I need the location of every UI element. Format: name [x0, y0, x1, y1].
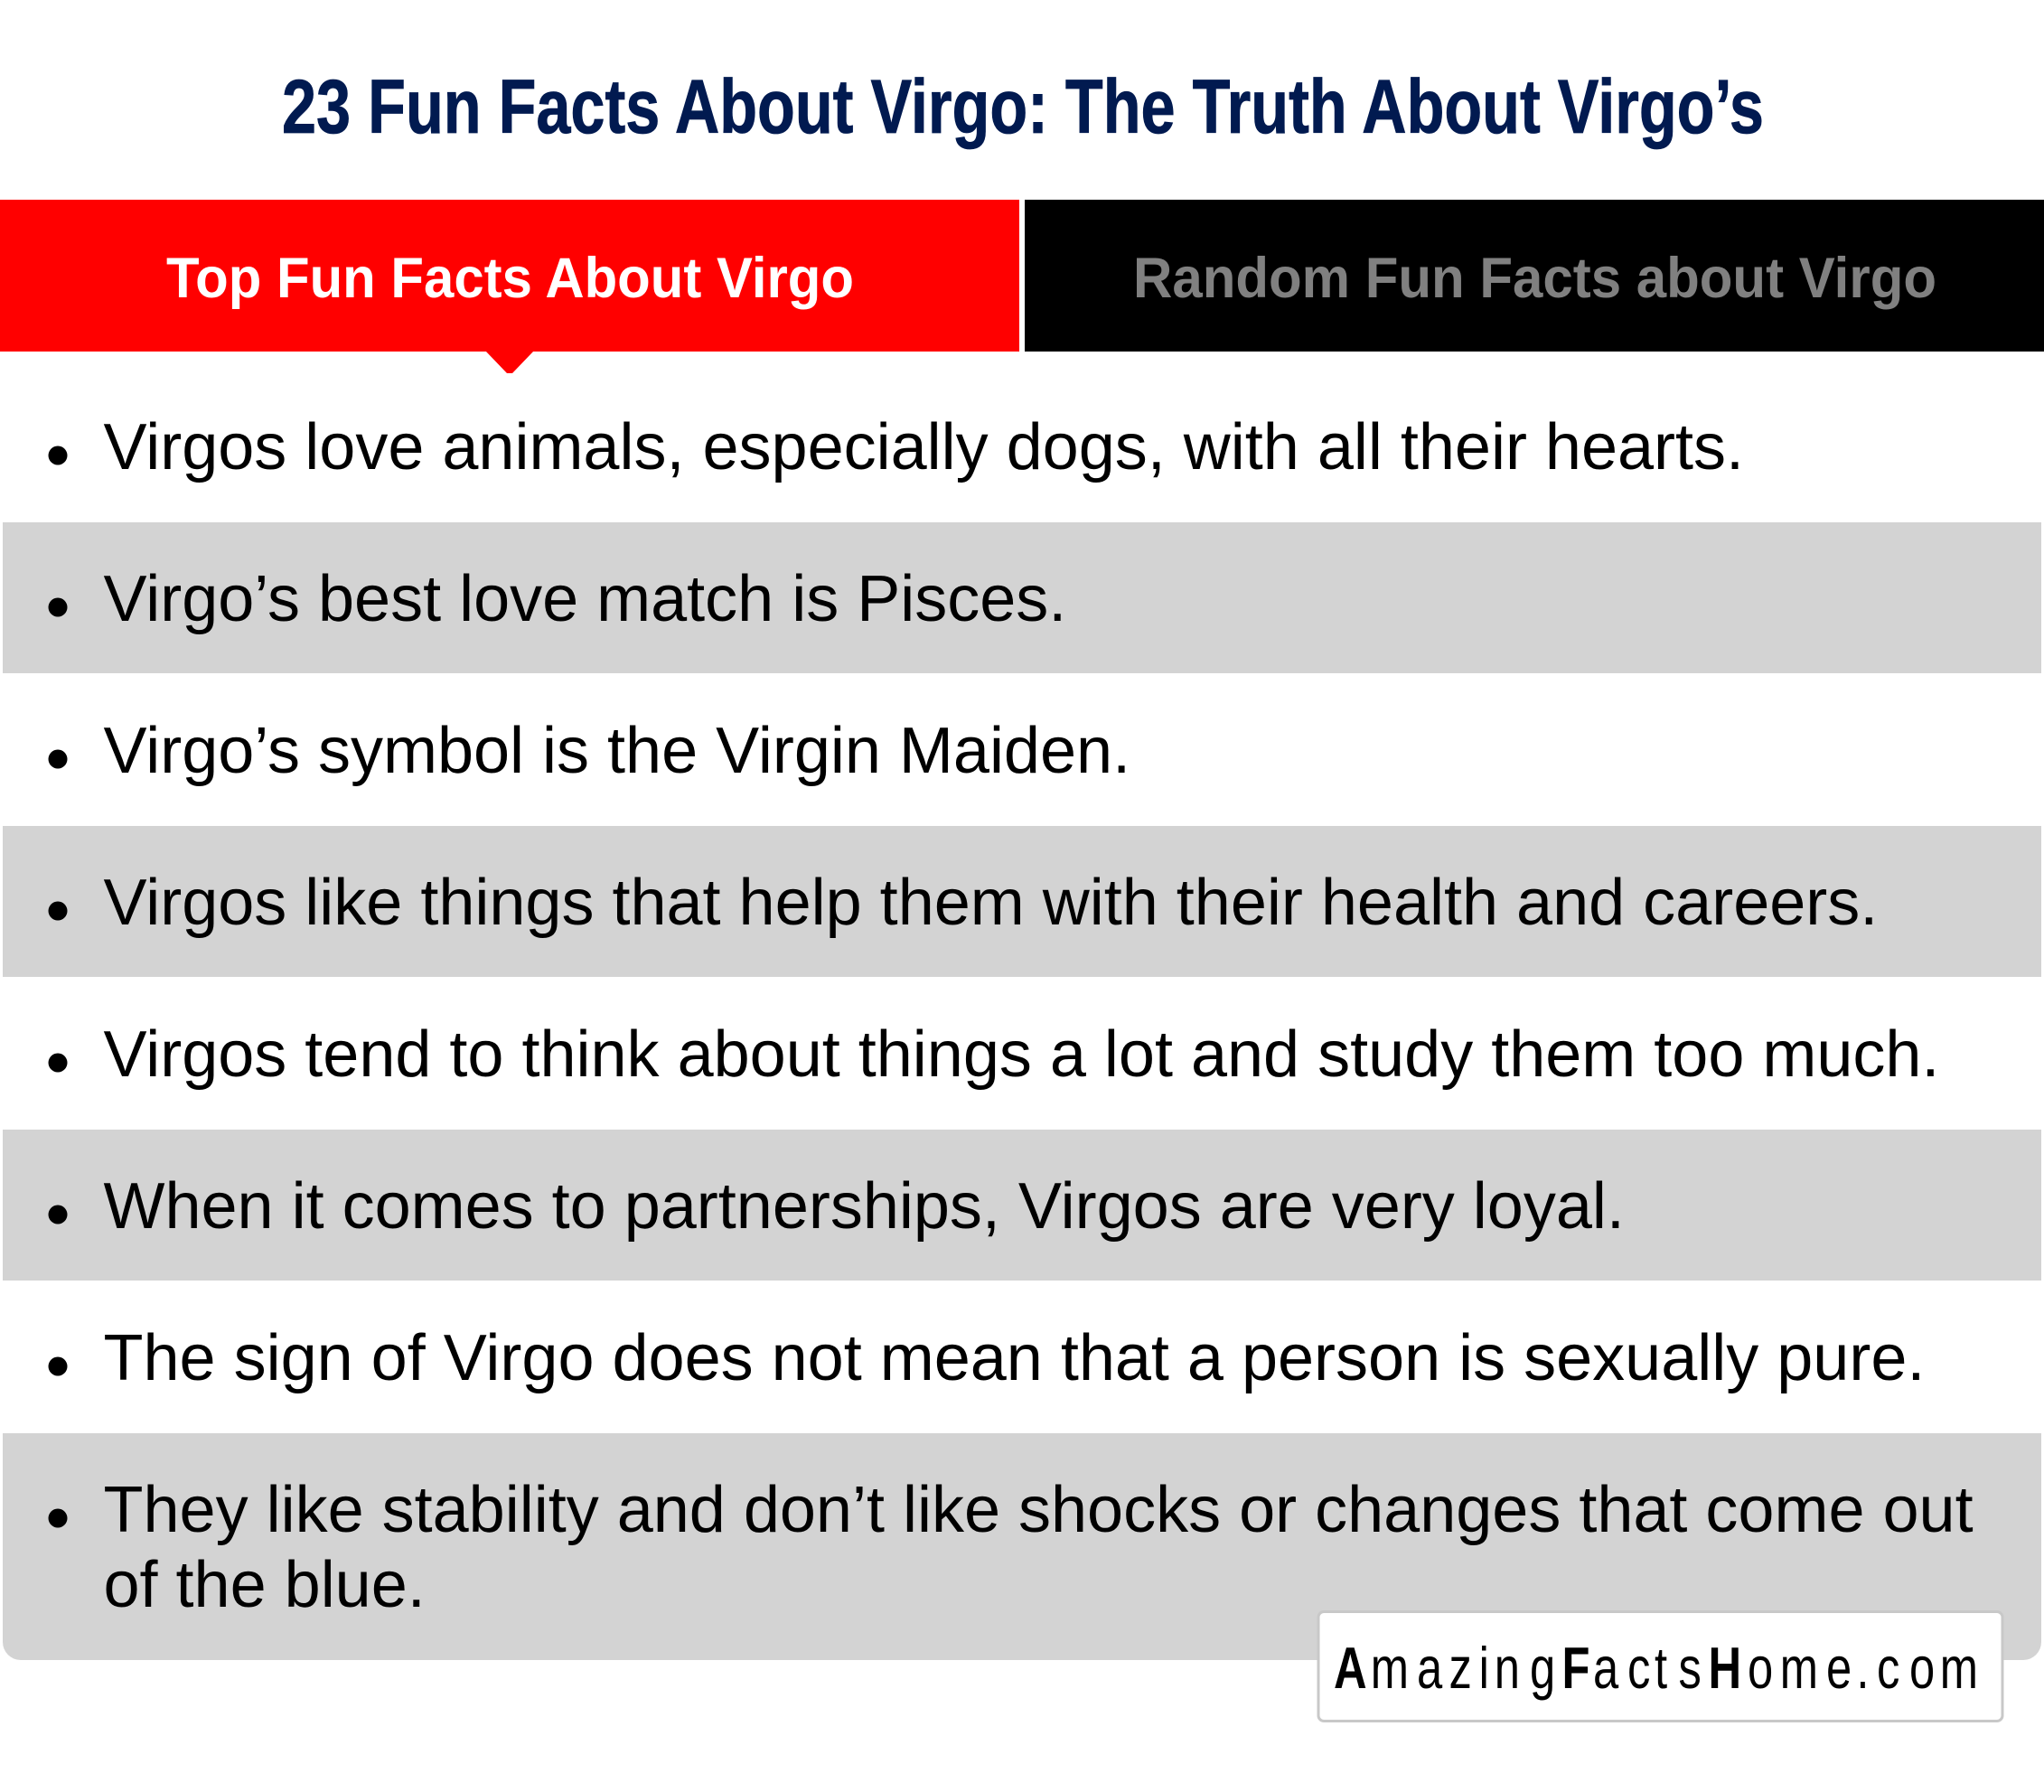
- tab: random fun facts (inactive): [1025, 200, 2044, 352]
- list row 7: The sign of Virgo does not mean that a person is sexually pure.: [103, 1322, 1925, 1394]
- list row 8: They like stability and don’t like shocks or changes that come out: [103, 1474, 1974, 1546]
- watermark badge: [1318, 1612, 2002, 1721]
- list row 2: Virgo’s best love match is Pisces.: [103, 563, 1066, 635]
- tab: top fun facts (active): [0, 200, 1019, 373]
- watermark badge: AmazingFactsHome.com: [1334, 1636, 1978, 1701]
- list row 1: Virgos love animals, especially dogs, with all their hearts.: [103, 411, 1744, 483]
- list row 5: Virgos tend to think about things a lot and study them too much.: [103, 1018, 1939, 1091]
- list row 2: [3, 522, 2041, 673]
- list row 4: Virgos like things that help them with their health and careers.: [103, 867, 1878, 939]
- list row 3: Virgo’s symbol is the Virgin Maiden.: [103, 715, 1130, 787]
- list row 8: [3, 1433, 2041, 1660]
- list row 6: When it comes to partnerships, Virgos are very loyal.: [103, 1170, 1625, 1243]
- tab: random fun facts (inactive): Random Fun Facts about Virgo: [1133, 247, 1936, 310]
- list row 4: [3, 826, 2041, 977]
- list row 8: of the blue.: [103, 1549, 426, 1621]
- tab: top fun facts (active): Top Fun Facts About Virgo: [166, 247, 854, 310]
- list row 6: [3, 1130, 2041, 1281]
